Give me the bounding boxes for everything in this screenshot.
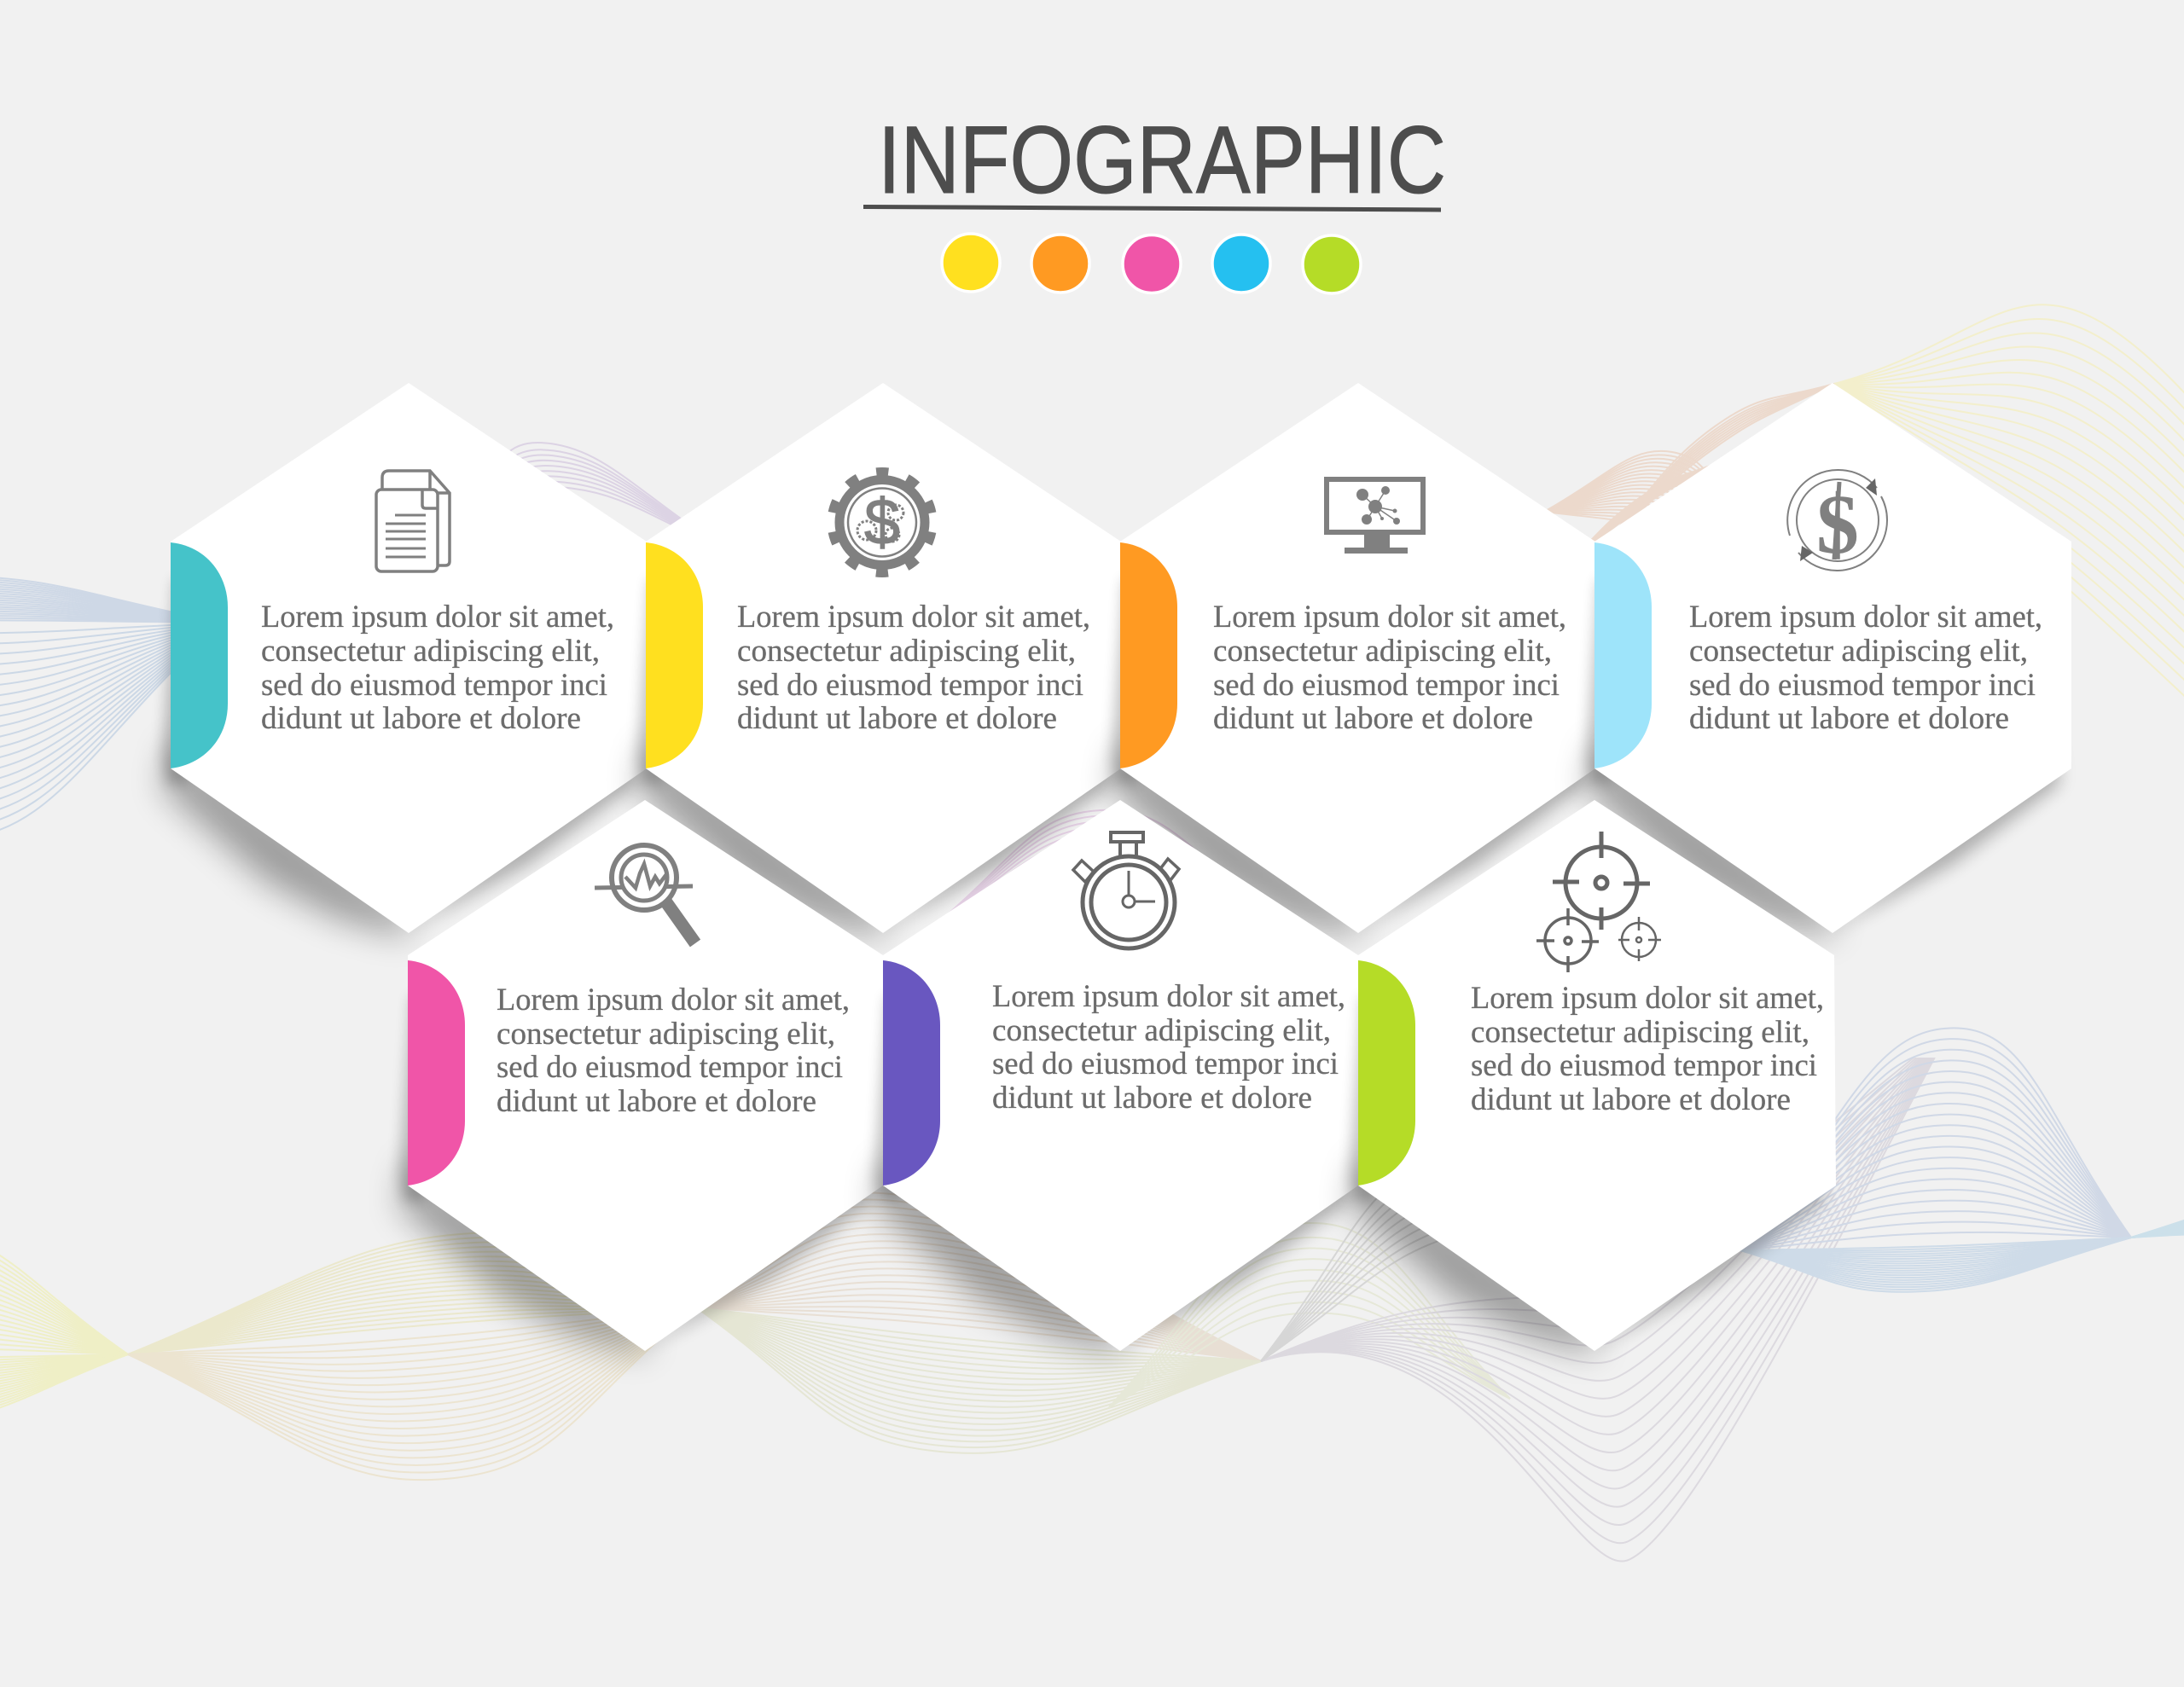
colour tab bbox=[1594, 542, 1652, 768]
colour tab bbox=[171, 542, 228, 768]
panel shadow bbox=[874, 996, 1348, 1354]
body text: sed do eiusmod tempor inci bbox=[261, 668, 607, 703]
hexagon bbox=[1120, 383, 1595, 933]
body text: consectetur adipiscing elit, bbox=[1471, 1015, 1809, 1050]
panel: step 3 bbox=[1112, 383, 1595, 937]
body text: didunt ut labore et dolore bbox=[737, 701, 1057, 736]
body text: consectetur adipiscing elit, bbox=[497, 1017, 835, 1052]
hexagon bbox=[1594, 383, 2071, 933]
colour tab bbox=[883, 960, 940, 1186]
body text: didunt ut labore et dolore bbox=[497, 1084, 816, 1119]
body text: consectetur adipiscing elit, bbox=[1213, 634, 1552, 669]
icon: documents bbox=[376, 471, 450, 571]
icon: targets bbox=[1536, 832, 1661, 972]
panel shadow bbox=[1112, 579, 1585, 937]
body text: sed do eiusmod tempor inci bbox=[1213, 668, 1560, 703]
body text: didunt ut labore et dolore bbox=[261, 701, 581, 736]
body text: consectetur adipiscing elit, bbox=[261, 634, 600, 669]
body text: consectetur adipiscing elit, bbox=[992, 1013, 1331, 1048]
body text: Lorem ipsum dolor sit amet, bbox=[992, 979, 1345, 1014]
panel: step 5 bbox=[399, 800, 883, 1354]
body text bbox=[1471, 981, 1824, 1117]
body text: Lorem ipsum dolor sit amet, bbox=[497, 983, 850, 1017]
title text: INFOGRAPHIC bbox=[878, 107, 1446, 213]
body text bbox=[1689, 600, 2042, 736]
colour dots bbox=[942, 234, 1361, 293]
icon: gear with dollar bbox=[833, 472, 932, 571]
colour tab bbox=[646, 542, 703, 768]
body text: consectetur adipiscing elit, bbox=[737, 634, 1076, 669]
body text: Lorem ipsum dolor sit amet, bbox=[261, 600, 614, 635]
icon: gear with dollar: $ bbox=[864, 486, 900, 559]
panel shadow bbox=[162, 579, 636, 937]
body text: sed do eiusmod tempor inci bbox=[992, 1046, 1339, 1081]
body text bbox=[497, 983, 850, 1119]
icon: magnifier with chart bbox=[595, 845, 695, 943]
body text: sed do eiusmod tempor inci bbox=[737, 668, 1083, 703]
panel shadow bbox=[399, 996, 873, 1354]
panel: step 6 bbox=[874, 800, 1358, 1354]
panel: step 4 bbox=[1586, 383, 2071, 937]
body text bbox=[737, 600, 1090, 736]
body text: consectetur adipiscing elit, bbox=[1689, 634, 2028, 669]
colour tab bbox=[408, 960, 465, 1186]
body text bbox=[261, 600, 614, 736]
panel shadow bbox=[637, 579, 1111, 937]
icon: dollar cycle bbox=[1787, 470, 1887, 571]
hexagon bbox=[883, 800, 1358, 1351]
body text: didunt ut labore et dolore bbox=[1213, 701, 1533, 736]
panel: step 7 bbox=[1350, 800, 1836, 1354]
body text: Lorem ipsum dolor sit amet, bbox=[737, 600, 1090, 635]
hexagon bbox=[171, 383, 647, 933]
body text bbox=[1213, 600, 1566, 736]
hexagon bbox=[408, 800, 883, 1351]
body text: didunt ut labore et dolore bbox=[992, 1081, 1312, 1116]
body text: Lorem ipsum dolor sit amet, bbox=[1213, 600, 1566, 635]
body text: didunt ut labore et dolore bbox=[1471, 1082, 1791, 1117]
panel: step 1 bbox=[162, 383, 647, 937]
icon: stopwatch bbox=[1073, 832, 1179, 948]
colour tab bbox=[1120, 542, 1177, 768]
panel shadow bbox=[1586, 579, 2059, 937]
title bbox=[863, 107, 1446, 213]
colour tab bbox=[1358, 960, 1415, 1186]
hexagon bbox=[1358, 800, 1836, 1351]
icon: dollar cycle: $ bbox=[1816, 477, 1859, 571]
title underline bbox=[863, 205, 1441, 212]
hexagon bbox=[646, 383, 1121, 933]
icon: monitor with network bbox=[1327, 479, 1423, 554]
body text: didunt ut labore et dolore bbox=[1689, 701, 2009, 736]
panel shadow bbox=[1350, 996, 1823, 1354]
body text: Lorem ipsum dolor sit amet, bbox=[1689, 600, 2042, 635]
body text bbox=[992, 979, 1345, 1116]
panel: step 2 bbox=[637, 383, 1121, 937]
body text: sed do eiusmod tempor inci bbox=[1689, 668, 2036, 703]
body text: sed do eiusmod tempor inci bbox=[497, 1050, 843, 1085]
body text: Lorem ipsum dolor sit amet, bbox=[1471, 981, 1824, 1016]
body text: sed do eiusmod tempor inci bbox=[1471, 1048, 1817, 1083]
